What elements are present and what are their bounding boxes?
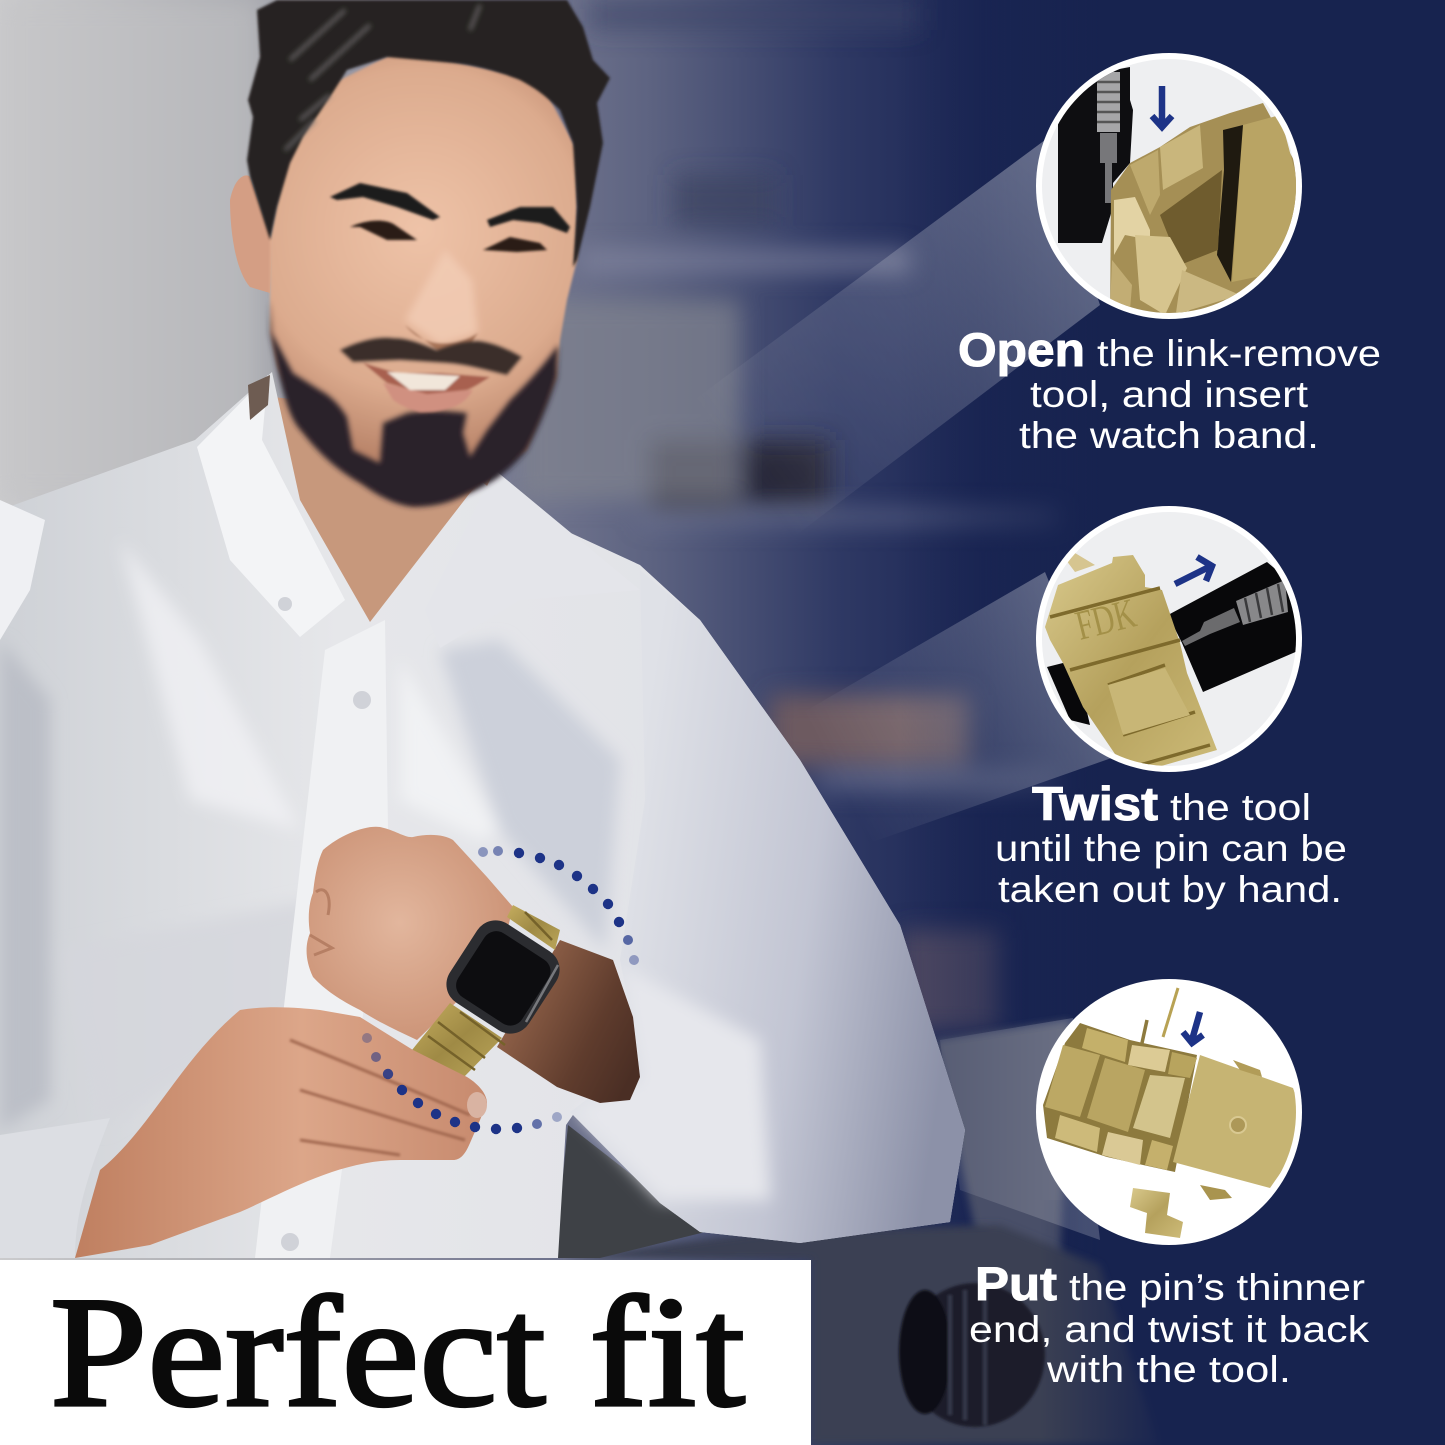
navy fade over lower right xyxy=(1040,1200,1170,1445)
smartwatch case xyxy=(438,912,568,1042)
title panel xyxy=(0,1260,811,1445)
light beam: step 1 xyxy=(640,140,1100,555)
shirt buttons xyxy=(278,597,371,1251)
light beam: step 3 xyxy=(940,1018,1100,1240)
circle photo 1: link-remove tool xyxy=(1036,53,1310,320)
left cuff xyxy=(0,1118,110,1258)
title: Perfect fit xyxy=(50,1265,745,1440)
man: lower forearm xyxy=(497,940,640,1103)
shirt collar right xyxy=(425,470,640,648)
camera lens on table xyxy=(899,1283,1045,1427)
man: raised fist xyxy=(307,827,513,1040)
blue dotted ring: lower arc xyxy=(362,1033,562,1134)
arrow down xyxy=(1183,1012,1203,1043)
step 2 text: the tool xyxy=(1170,787,1311,828)
man: ear xyxy=(230,175,272,293)
man: hair xyxy=(247,0,610,267)
gold band xyxy=(1110,103,1310,320)
step 3 text xyxy=(969,1257,1370,1390)
black tool xyxy=(1058,67,1133,243)
step 3 text: end, and twist it back xyxy=(969,1309,1370,1350)
upper links xyxy=(1082,1028,1128,1062)
step 1 text: the watch band. xyxy=(1019,415,1319,456)
step 3 text: the pin’s thinner xyxy=(1069,1267,1365,1308)
step 2 text: Twist xyxy=(1032,777,1158,830)
black tool xyxy=(1168,562,1300,692)
light beam: step 2 xyxy=(790,572,1120,850)
shirt placket xyxy=(255,620,388,1258)
man: eyebrows and eyes xyxy=(330,183,570,252)
step 1 text: Open xyxy=(958,323,1085,376)
detached link xyxy=(1130,1188,1183,1238)
moustache xyxy=(340,338,522,375)
big links xyxy=(1045,1045,1100,1117)
man: face xyxy=(270,50,577,507)
screw thread xyxy=(1236,580,1288,625)
step 2 text: until the pin can be xyxy=(995,828,1347,869)
man: lower hand xyxy=(75,1007,487,1258)
teeth xyxy=(387,372,460,390)
gold band xyxy=(1045,555,1217,775)
beard xyxy=(270,300,558,507)
blue dotted ring: upper arc xyxy=(478,846,639,965)
pins xyxy=(1163,988,1178,1037)
gold band base xyxy=(1043,1023,1197,1172)
arrow down xyxy=(1152,86,1172,127)
FDK engraving: FDK xyxy=(1071,591,1141,650)
clasp xyxy=(1173,1055,1298,1188)
lower lip xyxy=(383,383,473,412)
step 1 text: tool, and insert xyxy=(1030,374,1309,415)
lower links xyxy=(1055,1115,1100,1152)
shirt collar left xyxy=(197,375,345,637)
step 1 text xyxy=(958,323,1381,456)
mouth xyxy=(363,363,490,394)
step 3 text: with the tool. xyxy=(1046,1349,1291,1390)
arrow up right xyxy=(1175,557,1212,584)
step 3 text: Put xyxy=(975,1257,1057,1310)
man: white shirt torso and sleeve xyxy=(0,372,965,1258)
circle photo 2: twist tool xyxy=(1036,506,1302,775)
watch band xyxy=(412,905,560,1078)
screw thread xyxy=(1097,72,1120,132)
man: neck xyxy=(255,395,495,622)
step 2 text xyxy=(995,777,1347,910)
step 2 text: taken out by hand. xyxy=(998,869,1342,910)
step 1 text: the link-remove xyxy=(1097,333,1381,374)
seated legs and sofa xyxy=(555,1020,1160,1445)
nose xyxy=(405,250,478,345)
circle photo 3: pin insertion xyxy=(1036,979,1302,1245)
tattoo at neck xyxy=(248,375,270,420)
